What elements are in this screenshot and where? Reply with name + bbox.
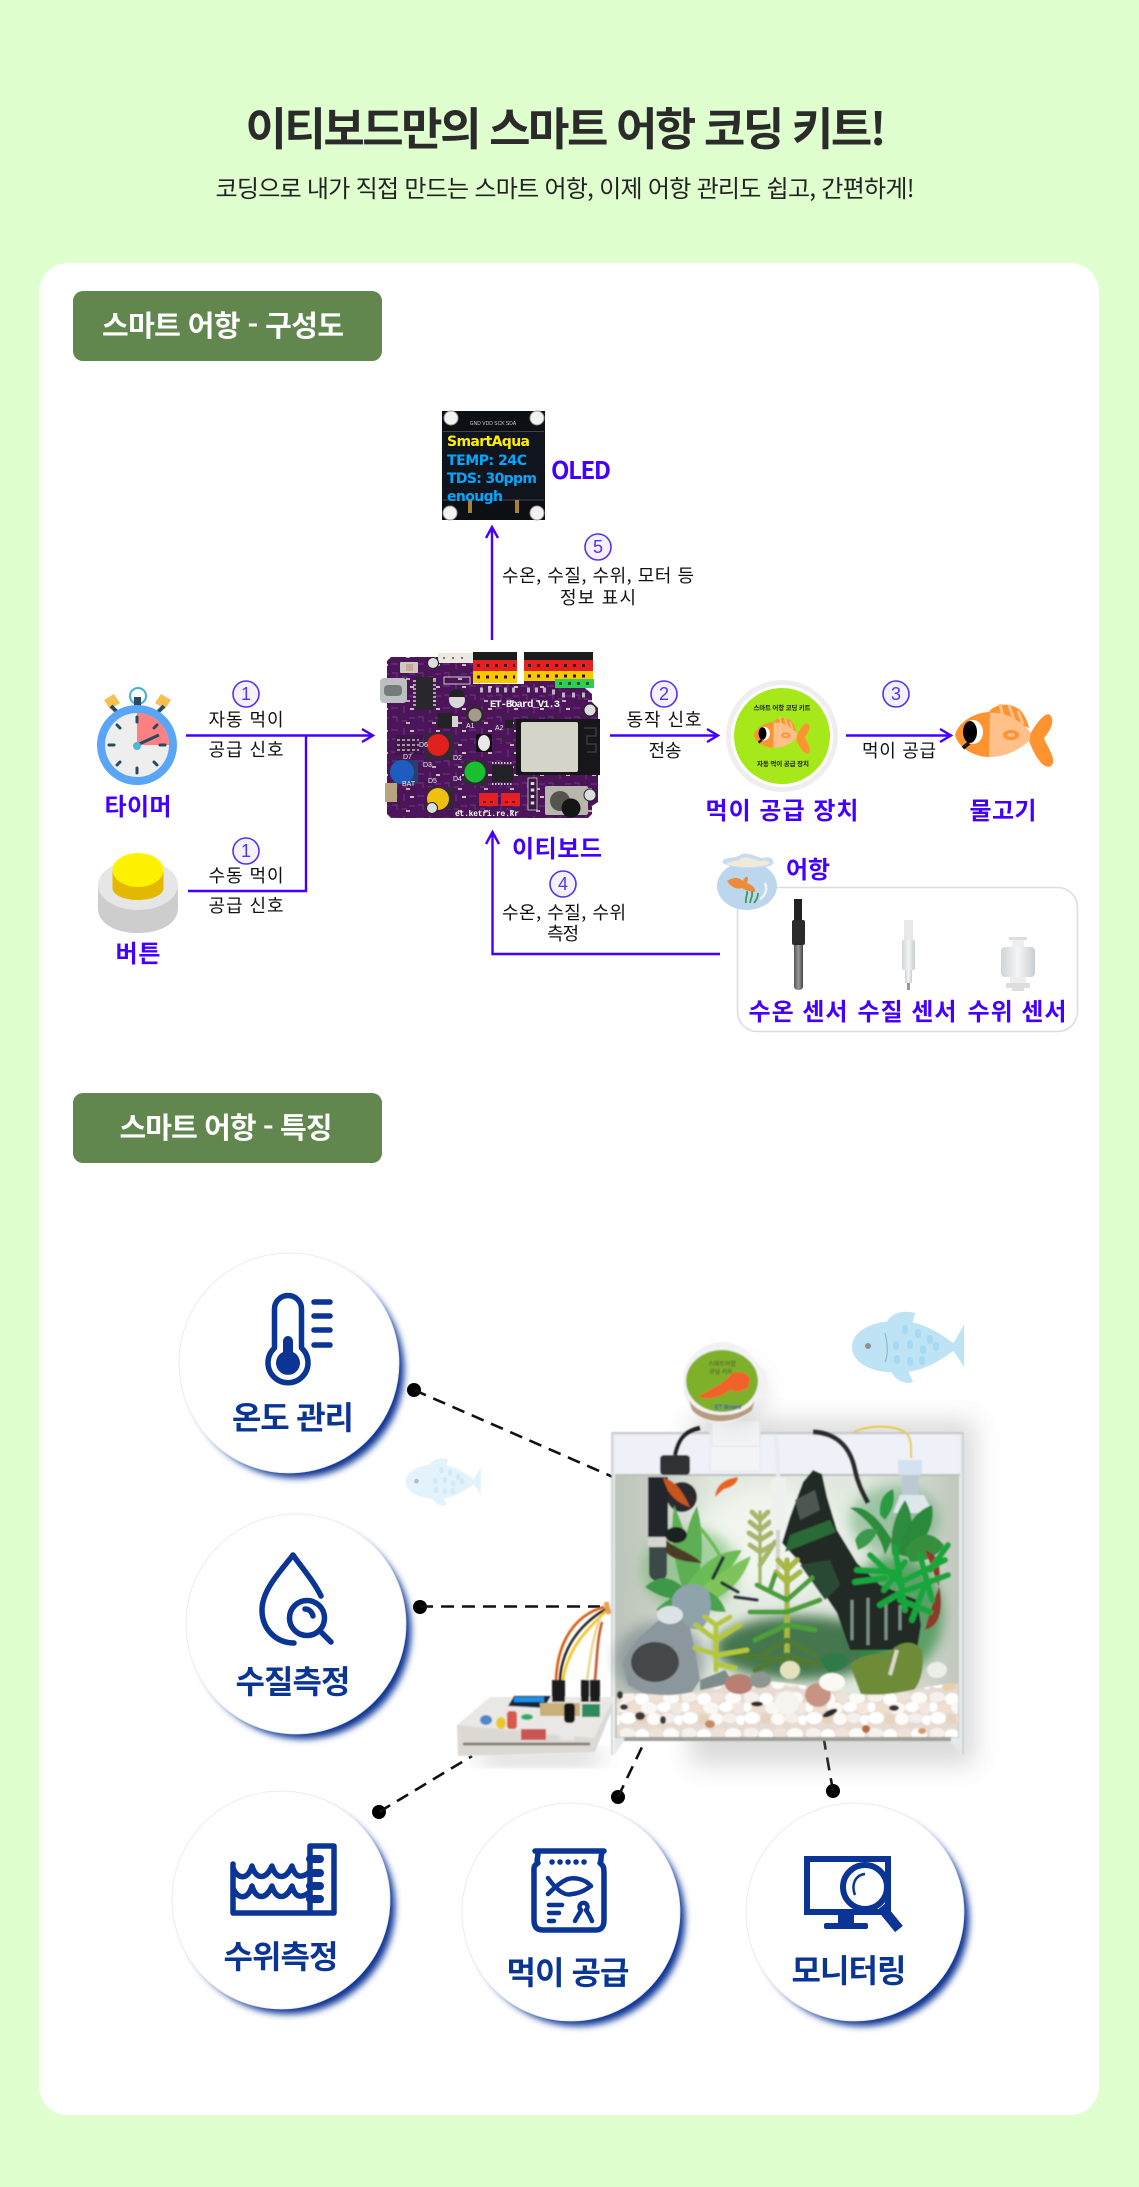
icon: small pale fish [406, 1458, 481, 1506]
icon: water drop magnifier [262, 1555, 331, 1643]
panel: fish tank sensors [738, 888, 1078, 1032]
icon: water level gauge [233, 1846, 334, 1913]
heading: features badge: 스마트 어항 - 특징 [120, 1105, 332, 1147]
step 1 manual note: 공급 신호 [208, 892, 284, 918]
step 4 note: 측정 [547, 920, 579, 946]
step 3 note: 먹이 공급 [862, 737, 936, 763]
icon: thermometer [268, 1296, 330, 1383]
plants right [850, 1489, 944, 1562]
label: ET-Board: 이티보드 [512, 829, 602, 864]
label: feeder: 먹이 공급 장치 [706, 791, 858, 826]
feature: water quality [186, 1514, 411, 1739]
label: water level sensor: 수위 센서 [968, 992, 1066, 1027]
label: button: 버튼 [116, 934, 160, 969]
label: fish: 물고기 [970, 791, 1036, 826]
icon: fishbowl [717, 853, 777, 910]
equipment in tank [771, 1427, 933, 1570]
icon: OLED display: SmartAqua [447, 434, 530, 450]
icon: OLED display: TDS: 30ppm [447, 471, 537, 487]
moss rock [820, 1643, 923, 1697]
icon: food jar [534, 1851, 604, 1930]
panel: system diagram [97, 411, 1078, 1032]
image: ET-Board circuit board [380, 652, 600, 819]
feature: feeding [462, 1803, 685, 2026]
label: fish tank: 어항 [786, 850, 830, 885]
step 5 note: 5 [593, 537, 603, 557]
board name: ET-Board_V1.3 [490, 699, 560, 711]
mounting holes [584, 704, 596, 716]
fish in water [663, 1477, 757, 1600]
step 1 automatic note: 1 [241, 684, 251, 704]
icon: OLED display: GND VDD SCK SDA [470, 421, 517, 427]
rock [782, 1470, 921, 1650]
potentiometer [545, 786, 588, 815]
feature: monitoring [746, 1803, 969, 2026]
label: OLED: OLED [551, 451, 611, 486]
arrow: feeder to fish [846, 729, 951, 742]
label: feeding: 먹이 공급 [506, 1948, 630, 1994]
arrow: timer and button to board [186, 729, 373, 891]
step 1 automatic note [208, 681, 284, 762]
gravel specks and pebbles [617, 1661, 956, 1734]
feeder on top of tank: 코딩 키트 [709, 1367, 733, 1376]
title: 이티보드만의 스마트 어항 코딩 키트! [246, 93, 886, 158]
icon: water level sensor [1001, 937, 1035, 991]
arrow: board to OLED [486, 527, 498, 640]
icon: push button [98, 853, 178, 933]
step 1 automatic note: 공급 신호 [208, 736, 284, 762]
image: ET-Board circuit board: D7 [403, 754, 412, 761]
headers right [524, 652, 593, 660]
jumpers [479, 793, 498, 806]
heater [648, 1428, 700, 1581]
step 3 note [862, 681, 936, 763]
arrow: board to feeder [610, 729, 718, 742]
cave ornament [623, 1584, 733, 1697]
step 5 note: 수온, 수질, 수위, 모터 등 [502, 562, 694, 588]
panel: white card [39, 263, 1099, 2115]
esp module [516, 719, 600, 775]
subtitle: 코딩으로 내가 직접 만드는 스마트 어항, 이제 어항 관리도 쉽고, 간편하게! [216, 169, 914, 204]
parts [449, 692, 465, 708]
icon: large blue fish [852, 1312, 964, 1383]
red leaves [925, 1550, 941, 1630]
image: ET-Board circuit board: D4 [453, 776, 462, 783]
step 2 note: 전송 [648, 737, 682, 763]
image: ET-Board circuit board: A1 [466, 723, 475, 730]
ET-Board in clear enclosure [457, 1680, 613, 1756]
leader lines [372, 1383, 840, 1819]
soft color masses behind plants [615, 1486, 943, 1698]
feeder on top of tank: ET Board [715, 1405, 742, 1411]
step 5 note: 정보 표시 [560, 584, 636, 610]
icon: OLED display: TEMP: 24C [447, 453, 527, 469]
headers left [473, 652, 517, 660]
image: ET-Board circuit board: A2 [495, 725, 504, 732]
label: monitoring: 모니터링 [792, 1946, 906, 1992]
step 1 manual note [208, 838, 284, 918]
wires [556, 1602, 609, 1680]
icon: temperature sensor [792, 899, 805, 990]
acrylic tank [612, 1431, 963, 1755]
panel: features [172, 1253, 975, 2026]
icon: feeder: 자동 먹이 공급 장치 [757, 758, 809, 768]
label: temperature sensor: 수온 센서 [748, 992, 848, 1027]
image: aquarium [457, 1342, 975, 1765]
heading: composition badge [73, 291, 382, 361]
chips [416, 677, 433, 710]
step 1 manual note: 1 [241, 841, 251, 861]
image: ET-Board circuit board: et.ketri.re.kr [455, 810, 519, 819]
plants left [645, 1505, 751, 1612]
step 2 note: 2 [659, 684, 669, 704]
arrow: sensors to board [486, 832, 720, 954]
step 4 note: 수온, 수질, 수위 [502, 899, 626, 925]
centre plant [735, 1560, 830, 1672]
image: ET-Board circuit board: D5 [428, 778, 437, 785]
icon: monitor magnifier [807, 1859, 899, 1929]
tactile buttons [426, 733, 454, 759]
bright green plant [855, 1545, 948, 1620]
reset switch [400, 662, 418, 673]
step 2 note: 동작 신호 [626, 706, 702, 732]
yellow plant [695, 1617, 747, 1670]
label: temperature: 온도 관리 [232, 1393, 354, 1439]
gravel [617, 1682, 958, 1737]
label: timer: 타이머 [104, 787, 172, 822]
icon: orange fish [955, 704, 1053, 767]
label: water quality: 수질측정 [236, 1657, 350, 1703]
step 1 automatic note: 자동 먹이 [208, 706, 284, 732]
usb port [380, 678, 407, 703]
icon: feeder: 스마트 어항 코딩 키트 [754, 702, 811, 712]
labels on pcb: D6 [419, 742, 428, 749]
step 5 note [502, 534, 694, 610]
step 1 manual note: 수동 먹이 [208, 862, 284, 888]
feeder on top of tank: 스마트어항 [708, 1359, 736, 1368]
icon: stopwatch [97, 688, 177, 785]
heading: composition badge: 스마트 어항 - 구성도 [102, 303, 344, 345]
image: ET-Board circuit board: D3 [423, 762, 432, 769]
icon: water quality sensor [902, 920, 915, 990]
icon: feeder [726, 680, 838, 792]
image: ET-Board circuit board: BAT [402, 781, 416, 788]
heading: features badge [73, 1093, 382, 1163]
icon: OLED display: enough [447, 489, 503, 505]
step 4 note [502, 871, 626, 946]
feature: water level [172, 1791, 395, 2014]
step 4 note: 4 [558, 874, 568, 894]
icon: OLED display [442, 411, 545, 520]
olive plant [749, 1512, 775, 1587]
feature: temperature [179, 1253, 404, 1478]
step 2 note [626, 681, 702, 763]
label: water quality sensor: 수질 센서 [858, 992, 956, 1027]
image: ET-Board circuit board: D2 [453, 755, 462, 762]
step 3 note: 3 [891, 684, 901, 704]
feeder on top of tank [683, 1342, 768, 1446]
connector [438, 653, 473, 663]
label: water level: 수위측정 [224, 1932, 338, 1978]
